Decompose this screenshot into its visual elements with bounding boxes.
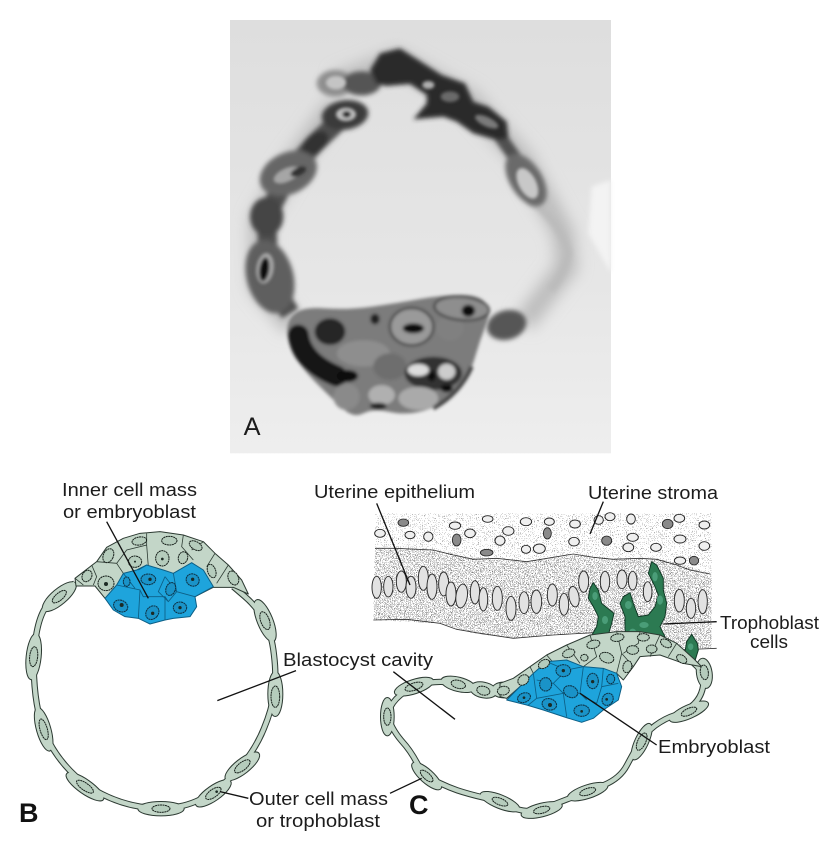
leader: trophoblast cells (663, 622, 717, 624)
embryoblast (blue) (507, 660, 622, 722)
lighter lower right of photo (588, 180, 611, 273)
label: embryoblast: Embryoblast (658, 736, 770, 757)
implanted trophoblast wall outline (381, 657, 714, 821)
leader: blastocyst cavity (393, 672, 455, 719)
label A: A (244, 413, 261, 441)
blue embryoblast (105, 563, 213, 624)
polar trophoblast mass (500, 632, 702, 698)
leader: blastocyst cavity (217, 671, 296, 701)
panel C: implanting blastocyst (372, 502, 717, 821)
photo background (230, 20, 611, 453)
trophoblast invading cells (dark green) (588, 562, 698, 661)
leader: uterine epithelium (377, 503, 410, 585)
leader: embryoblast (580, 693, 657, 745)
leader: outer cell mass (220, 792, 248, 798)
leader: uterine stroma (590, 502, 603, 534)
stroma stipple (375, 513, 712, 573)
blastocyst wall cells (238, 48, 555, 344)
stroma nuclei (375, 513, 710, 565)
leader: inner cell mass (107, 522, 148, 598)
panel letter B: B (19, 798, 38, 828)
leader: outer cell mass (390, 778, 422, 793)
panel A: micrograph of blastocyst (230, 20, 611, 453)
panel B: blastocyst diagram (24, 522, 296, 815)
epithelial nuclei (372, 566, 707, 620)
label: uterine stroma: Uterine stroma (588, 482, 719, 503)
wall cell nuclei (254, 76, 543, 285)
trophoblast nuclei (light green) (384, 633, 709, 815)
trophoblast wall outline (24, 578, 282, 815)
heading: inner cell mass: Inner cell mass (62, 479, 197, 500)
label: trophoblast: Trophoblast (720, 612, 819, 633)
epithelium stipple (373, 548, 717, 650)
uterine epithelium tissue (373, 548, 717, 650)
uterine stroma tissue (375, 513, 712, 573)
label: cells: cells (750, 631, 788, 652)
heading: or embryoblast: or embryoblast (63, 501, 196, 522)
label: or trophoblast: or trophoblast (256, 810, 380, 831)
inner mass green cell divisions (75, 533, 228, 585)
label: uterine epithelium: Uterine epithelium (314, 481, 475, 502)
trophoblast nuclei (29, 536, 280, 812)
inner mass green cells (75, 532, 248, 603)
soft halo around blastocyst wall (260, 60, 567, 327)
label: outer cell mass: Outer cell mass (249, 788, 388, 809)
panel letter C: C (409, 790, 428, 820)
faint right wall (530, 200, 568, 290)
inner cell mass (287, 294, 490, 415)
label: blastocyst cavity: Blastocyst cavity (283, 649, 434, 670)
polar trophoblast cell divisions (530, 632, 677, 680)
tissue boundary lines (375, 548, 710, 574)
